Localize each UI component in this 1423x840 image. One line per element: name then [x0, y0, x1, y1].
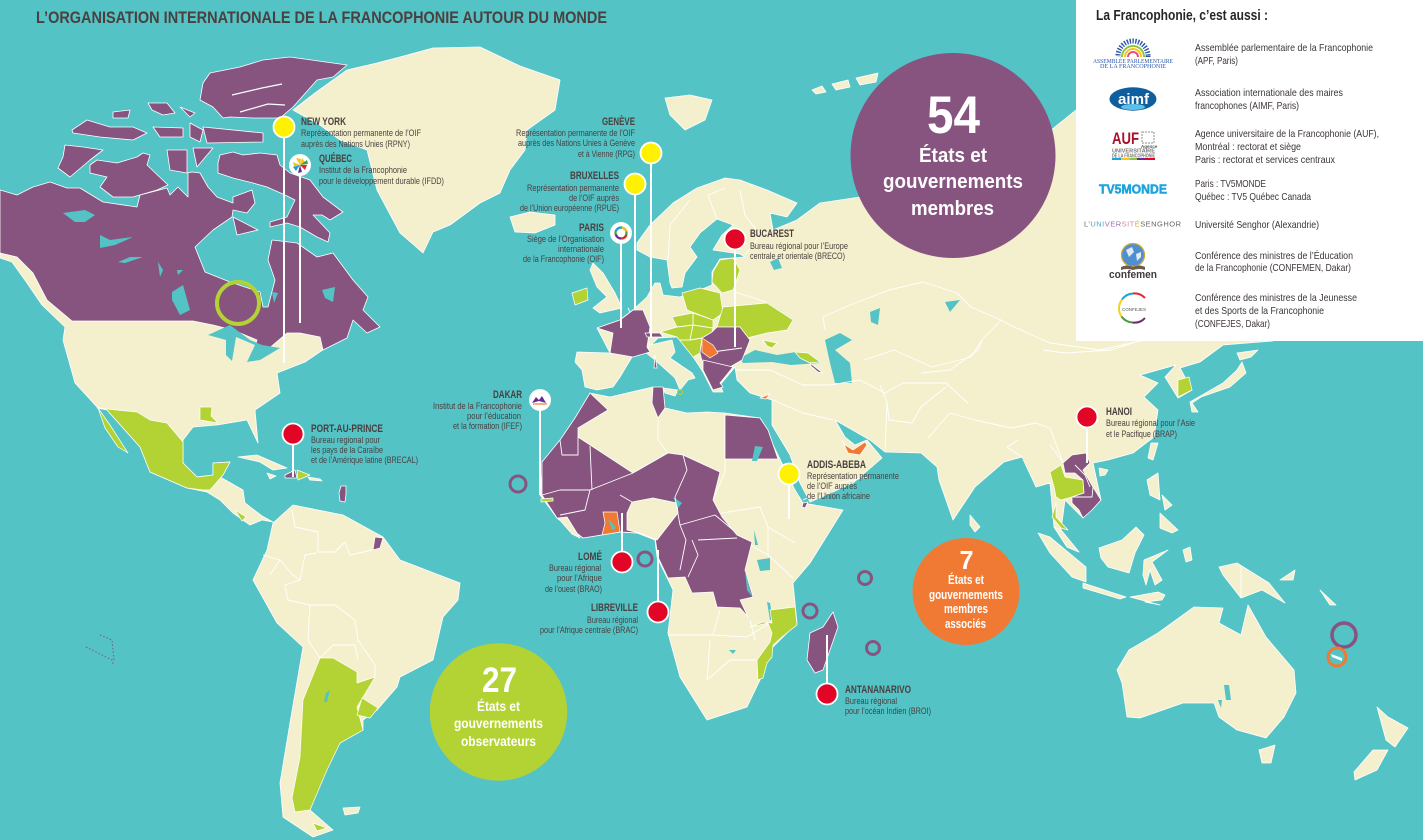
pin: Dakar: et la formation (IFEF): [453, 421, 522, 432]
text: TV5MONDE: [1195, 178, 1311, 203]
pin: Lomé: de l’ouest (BRAO): [545, 584, 602, 595]
text: CONFEMEN: de la Francophonie (CONFEMEN, Dakar): [1195, 262, 1351, 274]
text: APF: (APF, Paris): [1195, 55, 1238, 67]
logo: AIMF: [1110, 87, 1156, 111]
observers: central and eastern Europe: [572, 258, 820, 363]
stat circle: 27 observers: 27: [482, 661, 517, 700]
land: South America: [253, 505, 460, 837]
pin: Lomé: LOMÉ: [578, 550, 602, 563]
pin: Bucarest: [724, 228, 848, 347]
associate: Gulf and observer: Mozambique: [750, 440, 867, 680]
pin: Port-au-Prince: PORT-AU-PRINCE: [311, 423, 383, 435]
logo: CONFEMEN: confemen: [1109, 269, 1157, 281]
land: Hispaniola and Caribbean members: [285, 470, 346, 502]
pin: Hanoi: HANOI: [1106, 406, 1132, 418]
pin: Antananarivo: pour l’océan Indien (BROI): [845, 706, 931, 717]
pin: Lomé: pour l’Afrique: [557, 573, 602, 584]
observer ring: Quebec region: [217, 282, 259, 324]
pin: Bruxelles: [520, 170, 646, 308]
stat circle: 7 associates: gouvernements: [929, 588, 1003, 602]
logo: AIMF: aimf: [1118, 91, 1150, 108]
text: AIMF: [1195, 87, 1343, 112]
pin: Dakar: Institut de la Francophonie: [433, 401, 522, 412]
pin: Hanoi: et le Pacifique (BRAP): [1106, 429, 1177, 440]
inland seas: [740, 258, 960, 383]
pin: Québec: QUÉBEC: [319, 152, 352, 165]
members: Europe: [597, 310, 823, 399]
pin: Bucarest: Bureau régional pour l’Europe: [750, 241, 848, 252]
pin: Dakar: DAKAR: [493, 389, 522, 401]
pin: Bruxelles: Représentation permanente: [527, 183, 619, 194]
stat circle: 54 member states: membres: [911, 198, 994, 220]
logo: CONFEJES: [1119, 293, 1146, 323]
text: AUF: [1195, 128, 1379, 166]
pin: Québec: pour le développement durable (IFDD): [319, 176, 444, 187]
logo: TV5MONDE: TV5MONDE: [1099, 182, 1167, 196]
stat circle: 54 member states: gouvernements: [883, 171, 1023, 193]
pin: Genève: et à Vienne (RPG): [578, 149, 635, 160]
panel heading: La Francophonie, c’est aussi :: [1096, 7, 1268, 24]
logo: Université Senghor: L’UNIVERSITÉSENGHOR: [1084, 220, 1182, 228]
logo: AUF: Agence: [1141, 144, 1158, 149]
pin: Hanoi: [1076, 406, 1195, 463]
text: APF: [1195, 42, 1373, 67]
pin: Paris: de la Francophonie (OIF): [523, 254, 604, 265]
text: AUF: Paris : rectorat et services centraux: [1195, 154, 1336, 166]
stat circle: 7 associates: associés: [945, 617, 986, 631]
pin: Port-au-Prince: les pays de la Caraïbe: [311, 445, 383, 456]
pin: Bruxelles: de l’OIF auprès: [569, 193, 619, 204]
stat circle: 7 associates: [912, 538, 1020, 645]
pin: Port-au-Prince: et de l’Amérique latine (BRECAL): [311, 455, 418, 466]
text: AUF: Agence universitaire de la Francophonie (AUF),: [1195, 128, 1379, 140]
logo: AUF: [1112, 129, 1158, 160]
stat circle: 7 associates: 7: [960, 545, 974, 575]
pin: Québec: Institut de la Francophonie: [319, 165, 407, 176]
pin: Dakar: [433, 389, 551, 495]
pin: Paris: internationale: [558, 244, 604, 255]
pin: Addis-Abeba: [778, 459, 899, 519]
text: CONFEJES: (CONFEJES, Dakar): [1195, 318, 1270, 330]
logo: CONFEMEN: [1109, 244, 1157, 281]
pin: Bruxelles: BRUXELLES: [570, 170, 619, 182]
stat circle: 27 observers: observateurs: [461, 733, 536, 749]
text: CONFEJES: Conférence des ministres de la Jeunesse: [1195, 292, 1357, 304]
logo: APF: [1093, 41, 1173, 79]
panel: La Francophonie, c'est aussi: [1076, 0, 1423, 341]
pin: Addis-Abeba: ADDIS-ABEBA: [807, 459, 866, 471]
pin: New York: NEW YORK: [301, 116, 346, 128]
pin: New York: [274, 116, 421, 363]
pin: Libreville: LIBREVILLE: [591, 602, 638, 614]
lakes: [63, 210, 335, 362]
pin: Port-au-Prince: [282, 423, 418, 477]
member states: Canada: [0, 57, 380, 362]
text: AIMF: Association internationale des maires: [1195, 87, 1343, 99]
pin: Dakar: pour l’éducation: [467, 411, 521, 422]
pin: Genève: auprès des Nations Unies à Genève: [518, 138, 635, 149]
land: Africa: [540, 387, 843, 720]
observer: Mexico and Louisiana: [97, 407, 246, 521]
land: Asian islands: [970, 350, 1336, 605]
pin: Paris: [523, 222, 632, 328]
lakes and water: Africa and Middle East: [729, 446, 773, 654]
pin: Genève: [516, 115, 662, 337]
title: L’ORGANISATION INTERNATIONALE DE LA FRANCOPHONIE AUTOUR DU MONDE: [36, 8, 607, 27]
stat circle: 7 associates: États et: [948, 572, 985, 587]
members and observers: Southeast Asia and Korea: [1050, 377, 1192, 530]
pin: Lomé: Bureau régional: [549, 563, 601, 574]
stat circle: 54 member states: 54: [927, 86, 980, 145]
pin: Antananarivo: [816, 635, 931, 717]
stat circle: 7 associates: membres: [944, 602, 988, 616]
pin: Libreville: [540, 550, 668, 636]
text: TV5MONDE: Paris : TV5MONDE: [1195, 178, 1266, 190]
pin: Genève: Représentation permanente de l’OIF: [516, 128, 635, 139]
pin: Québec: [289, 152, 444, 323]
stat circle: 54 member states: États et: [919, 144, 987, 167]
pin: Antananarivo: ANTANANARIVO: [845, 684, 911, 696]
text: CONFEJES: et des Sports de la Francophonie: [1195, 305, 1324, 317]
pin: Libreville: pour l’Afrique centrale (BRAC): [540, 625, 638, 636]
logo: AUF: DE LA FRANCOPHONIE: [1112, 154, 1155, 160]
text: APF: Assemblée parlementaire de la Francophonie: [1195, 42, 1373, 54]
pin: Lomé: [545, 513, 632, 595]
logo: CONFEJES: CONFEJES: [1122, 307, 1146, 312]
pin: Hanoi: Bureau régional pour l’Asie: [1106, 418, 1195, 429]
pin: Bucarest: BUCAREST: [750, 228, 794, 240]
pin: Bucarest: centrale et orientale (BRECO): [750, 251, 845, 262]
pin: Libreville: Bureau régional: [587, 615, 638, 626]
text: CONFEMEN: [1195, 249, 1353, 274]
logo: APF: ASSEMBLÉE PARLEMENTAIRE: [1093, 57, 1173, 65]
pin: Port-au-Prince: Bureau regional pour: [311, 435, 380, 446]
stat circle: 27 observers: États et: [477, 698, 520, 714]
stat circle: 27 observers: [430, 643, 567, 781]
pin: New York: auprès des Nations Unies (RPNY): [301, 139, 410, 150]
pin: Antananarivo: Bureau régional: [845, 696, 897, 707]
borders: Europe and Asia: [628, 188, 1145, 500]
stat circle: 54 member states: [850, 53, 1056, 258]
logo: AUF: UNIVERSITAIRE: [1112, 148, 1155, 154]
logo: APF: DE LA FRANCOPHONIE: [1100, 64, 1166, 70]
text: AIMF: francophones (AIMF, Paris): [1195, 100, 1299, 112]
pin: Addis-Abeba: de l’Union africaine: [807, 491, 870, 502]
stat circle: 27 observers: gouvernements: [454, 715, 543, 731]
land: Greenland and Arctic islands: [293, 47, 878, 253]
text: CONFEMEN: Conférence des ministres de l’Éducation: [1195, 249, 1353, 262]
pin: Paris: PARIS: [579, 222, 604, 234]
pin: Genève: GENÈVE: [602, 115, 635, 128]
land: Eurasia: [575, 100, 1273, 552]
pin: New York: Représentation permanente de l’OIF: [301, 128, 421, 139]
pin: Addis-Abeba: Représentation permanente: [807, 471, 899, 482]
land: Oceania: [1117, 605, 1408, 780]
logo: AUF: AUF: [1112, 129, 1139, 148]
text: AUF: Montréal : rectorat et siège: [1195, 141, 1301, 153]
text: Senghor: Université Senghor (Alexandrie): [1195, 219, 1319, 231]
pin: Paris: Siège de l’Organisation: [527, 234, 604, 245]
members: Africa: [541, 387, 808, 617]
land: North America: [0, 253, 330, 525]
pin: Addis-Abeba: de l’OIF auprès: [807, 481, 857, 492]
text: TV5MONDE: Québec : TV5 Québec Canada: [1195, 191, 1311, 203]
member: Madagascar: [807, 612, 838, 673]
pin: Bruxelles: de l’Union européenne (RPUE): [520, 203, 619, 214]
small island rings: [86, 476, 1356, 666]
text: CONFEJES: [1195, 292, 1357, 330]
